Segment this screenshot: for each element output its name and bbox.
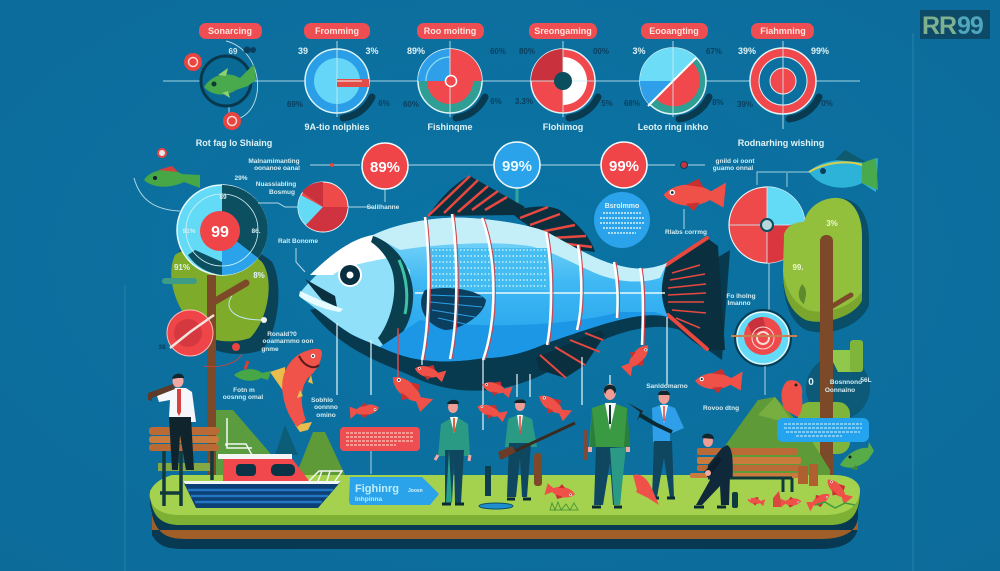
flag note labels: Oonnaino — [825, 387, 855, 394]
caption: Fishinqme — [427, 122, 473, 132]
person with binoculars — [148, 374, 196, 470]
note label right: guamo onnal — [713, 165, 753, 172]
pill heading: Fromming — [315, 26, 359, 36]
small labels left: ooamarnmo oon — [263, 338, 313, 345]
panel: top gauge 2 — [287, 23, 390, 132]
small labels left: gnme — [261, 346, 279, 353]
panel: top gauge 6: 39% — [738, 46, 756, 56]
tail — [662, 238, 725, 350]
pill heading: Sreongaming — [534, 26, 592, 36]
red pie chart: Nuassiabling — [256, 181, 296, 188]
right tree: 99. — [792, 263, 804, 272]
small labels left: oosnng omal — [223, 394, 263, 401]
hills left — [216, 410, 345, 475]
main fish — [299, 176, 730, 391]
caption: Flohimog — [543, 122, 583, 132]
pill heading: Fiahmning — [760, 26, 806, 36]
tie — [177, 389, 181, 416]
head — [300, 235, 412, 347]
hill right — [722, 397, 830, 480]
green fish left — [134, 149, 200, 211]
pill heading: Sonarcing — [208, 26, 252, 36]
small labels left: Fotn m — [233, 387, 255, 394]
legs — [169, 417, 194, 470]
bench right with seated person — [690, 434, 818, 508]
panel: top gauge 6: 99% — [811, 46, 829, 56]
panel: top gauge 6: 0% — [821, 99, 833, 108]
hanging lines — [337, 317, 667, 430]
logo — [920, 10, 990, 40]
red pie chart: Salilhanne — [367, 204, 400, 211]
small labels left: Ronald?0 — [267, 331, 297, 338]
badge: 99% blue: 99% — [502, 158, 532, 175]
timeline axis — [163, 80, 860, 82]
right tree — [783, 198, 869, 480]
panel: top gauge 4: 3.3% — [515, 97, 533, 106]
person 2 with rifle — [479, 399, 575, 509]
flag note labels: 56L — [860, 377, 872, 384]
belly band — [380, 312, 668, 361]
panel: top gauge 5 — [624, 23, 724, 132]
panel: top gauge 1 fish: 69 — [229, 47, 238, 56]
person 4 blue jacket with pistol — [628, 390, 684, 498]
standing red fish right — [781, 380, 802, 417]
badge: 99% red: 99% — [609, 158, 639, 175]
blue fishing label — [349, 477, 439, 505]
panel: top gauge 2: 3% — [365, 46, 379, 56]
red fish upper right: Rlabs corrmg — [665, 229, 707, 236]
red fish lower right: Rovoo dtng — [703, 405, 739, 412]
red pie chart: Bosmug — [269, 189, 295, 196]
panel: top gauge 1 fish — [184, 23, 272, 148]
caption: Rot fag lo Shiaing — [196, 138, 272, 148]
small target: Fo lholng — [726, 293, 756, 300]
flag note labels — [808, 377, 872, 394]
small target — [726, 293, 797, 395]
panel: top gauge 3: 60% — [490, 47, 506, 56]
note: blue circle text — [594, 192, 650, 248]
small labels left: oonnno — [314, 404, 338, 411]
panel: top gauge 3: 60% — [403, 100, 419, 109]
red and white bands — [422, 214, 643, 360]
icon: red marker top — [184, 53, 202, 71]
logo: 99 — [957, 12, 983, 40]
badge: 89% — [362, 143, 408, 202]
right tree: 3% — [826, 219, 838, 228]
panel: top gauge 2: 6% — [378, 99, 390, 108]
small note labels: oonanoe oanal — [254, 165, 300, 172]
red gauge right — [729, 172, 810, 310]
bench left — [149, 427, 219, 506]
red fish upper right — [664, 179, 726, 236]
boat — [183, 418, 342, 508]
caption: 9A-tio nolphies — [304, 122, 370, 132]
panel: top gauge 4 — [515, 23, 613, 132]
panel: top gauge 5: 8% — [712, 98, 724, 107]
small target: Imanno — [727, 300, 751, 307]
big left gauge: 29% — [234, 175, 248, 182]
logo: RR — [922, 12, 957, 40]
shirt — [157, 388, 196, 422]
small labels left: Sobhlo — [311, 397, 333, 404]
shadow — [310, 250, 730, 391]
panel: top gauge 5: 3% — [632, 46, 646, 56]
big left gauge: 8% — [253, 271, 265, 280]
panel: top gauge 2: 69% — [287, 100, 303, 109]
note: blue circle text: Bsrolmmo — [605, 203, 639, 210]
panel: top gauge 3: 89% — [407, 46, 425, 56]
badge: 99% red — [601, 142, 647, 188]
small green fish — [234, 361, 271, 381]
note label right: gnild oi oont — [716, 158, 755, 165]
person 1 green suit — [435, 400, 470, 504]
pectoral fin — [421, 288, 486, 330]
big left gauge: 86. — [251, 228, 261, 235]
gill — [371, 236, 413, 348]
panel: top gauge 3: 6% — [490, 97, 502, 106]
pill heading: Eooangting — [649, 26, 699, 36]
badge: 99% blue — [494, 142, 540, 210]
flag note labels: 0 — [808, 377, 814, 388]
flag note labels: Bosnnono — [830, 379, 862, 386]
big left gauge: 91% — [174, 263, 190, 272]
panel: top gauge 3 — [403, 23, 506, 132]
bush behind note — [798, 402, 850, 454]
panel: top gauge 4: 5% — [601, 99, 613, 108]
panel: top gauge 4: 80% — [519, 47, 535, 56]
red pie chart — [256, 181, 400, 232]
panel: top gauge 4: 00% — [593, 47, 609, 56]
colourful fish top right — [809, 150, 878, 192]
big left gauge: 99 — [211, 224, 229, 241]
seated person — [694, 434, 733, 507]
small labels left — [223, 331, 338, 419]
hanging red fish group — [348, 339, 655, 424]
mouth — [305, 279, 337, 307]
small labels left: omino — [316, 412, 336, 419]
round flag note right — [806, 340, 870, 420]
midline — [415, 292, 665, 294]
person 3 tall green suit — [583, 384, 630, 507]
pill heading: Roo moiting — [424, 26, 476, 36]
dorsal fins — [428, 176, 595, 252]
red fish lower right: Sanldomarno — [646, 383, 688, 390]
ventral fin — [536, 330, 605, 378]
top surface — [150, 475, 860, 515]
ground platform — [150, 475, 860, 549]
layers — [152, 500, 858, 549]
blue fishing label: Inhpinna — [355, 496, 382, 503]
scales — [430, 248, 548, 290]
blue fishing label: Joosn — [408, 488, 423, 494]
big left gauge — [174, 175, 268, 280]
caption: Leoto ring inkho — [638, 122, 709, 132]
big left gauge: 91% — [182, 228, 196, 235]
head — [172, 374, 184, 388]
badge: 89%: 89% — [370, 159, 400, 176]
icon: green fish — [204, 64, 256, 98]
ground red fish group — [544, 474, 855, 513]
green fish bottom right — [840, 442, 874, 470]
large red carp — [270, 349, 322, 432]
blue fishing label: Fighinrg — [355, 483, 399, 495]
eye — [338, 263, 362, 287]
small note labels — [248, 158, 360, 272]
blue note panel right — [777, 418, 869, 442]
left tree — [165, 243, 278, 485]
panel: top gauge 6 — [737, 23, 833, 148]
panel: top gauge 5: 68% — [624, 99, 640, 108]
red fish lower right — [646, 369, 743, 412]
small note labels: Malnamimanting — [248, 158, 300, 165]
small note labels: Ralt Bonome — [278, 238, 318, 245]
red note panel — [340, 427, 420, 474]
panel: top gauge 5: 67% — [706, 47, 722, 56]
rifle — [148, 384, 175, 401]
panel: top gauge 2: 39 — [298, 46, 308, 56]
big left gauge: 89 — [219, 194, 227, 201]
pale back band — [373, 218, 667, 282]
connector line — [408, 164, 705, 166]
left red circle — [158, 310, 214, 356]
caption: Rodnarhing wishing — [738, 138, 824, 148]
icon: red marker bottom — [223, 112, 241, 130]
panel: top gauge 6: 39% — [737, 100, 753, 109]
note label right — [680, 158, 755, 172]
left red circle: 38 — [158, 344, 166, 351]
body — [300, 218, 668, 361]
